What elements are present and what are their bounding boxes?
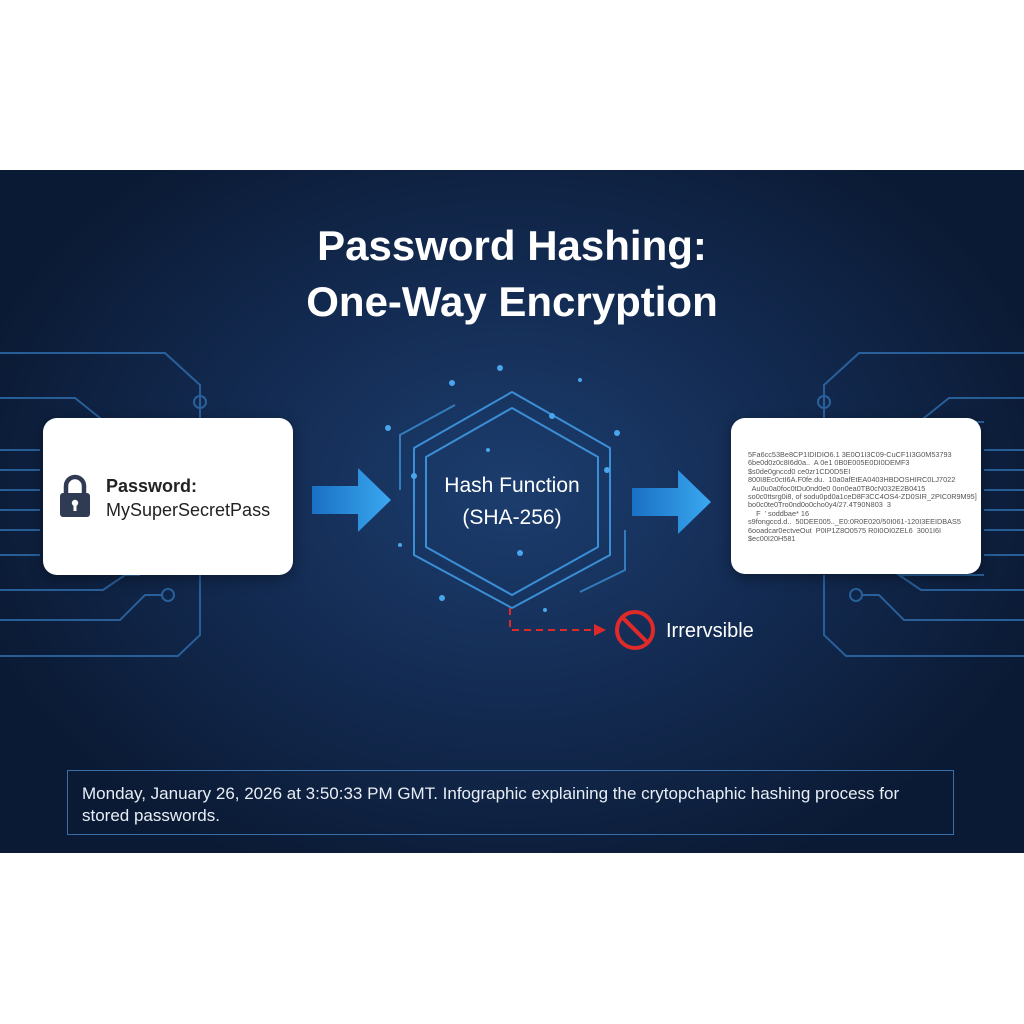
arrow 2 [632,470,711,534]
text: password label: Password: [106,476,197,496]
text: password label: MySuperSecretPass [106,500,270,520]
caption box: Monday, January 26, 2026 at 3:50:33 PM GMT. Infographic explaining the crytopchaphic hashing process for stored passwords. [82,784,899,825]
irreversible callout [509,608,754,650]
panel: hash output: 5Fa6cc53Be8CP1IDIDIO6.1 3E0O1I3C09-CuCF1I3G0M53793 6be0d0z0c8I6d0a.. A 0e1 0B0E005E0DI0DEMF3 $s0de0gnccd0 ce0zr1CD0D5EI 800I8Ec0ctI6A.F0fe.du. 10a0afEtEA0403HBDOSHIRC0LJ7022 Au0u0a0foc0tDu0nd0e0 0on0ea0TB0cN032E2B0415 so0c0ttsrg0i8, of sodu0pd0a1ceD8F3CC4OS4-ZD0SIR_2PIC0R9M95] bo0c0te0Tro0nd0o0cho0y4/27.4T90N803 3 F ' soddbae* 16 s9fongccd.d.. 50DEE005.._E0:0R0E020/50I061-120I3EEIDBAS5 6ooadcar0ectveOut P0IP1Z8O0575 R0I0OI0ZEL6 3001I6I $ec00I20H581 [748,450,977,543]
icon: padlock [60,474,90,517]
panel: hash output [731,418,981,574]
text: password label [106,476,270,520]
title [306,222,718,325]
irreversible callout: Irrervsible [666,620,754,642]
icon: prohibited [617,612,653,648]
hash function hexagon [385,365,626,612]
arrow 1 [312,468,391,532]
hash function hexagon: (SHA-256) [462,506,562,529]
title: Password Hashing: [317,222,707,269]
title: One-Way Encryption [306,278,718,325]
background panel [0,170,1024,853]
panel: password input [43,418,293,575]
caption box [67,770,954,835]
text: hash function: Hash Function [444,474,580,497]
